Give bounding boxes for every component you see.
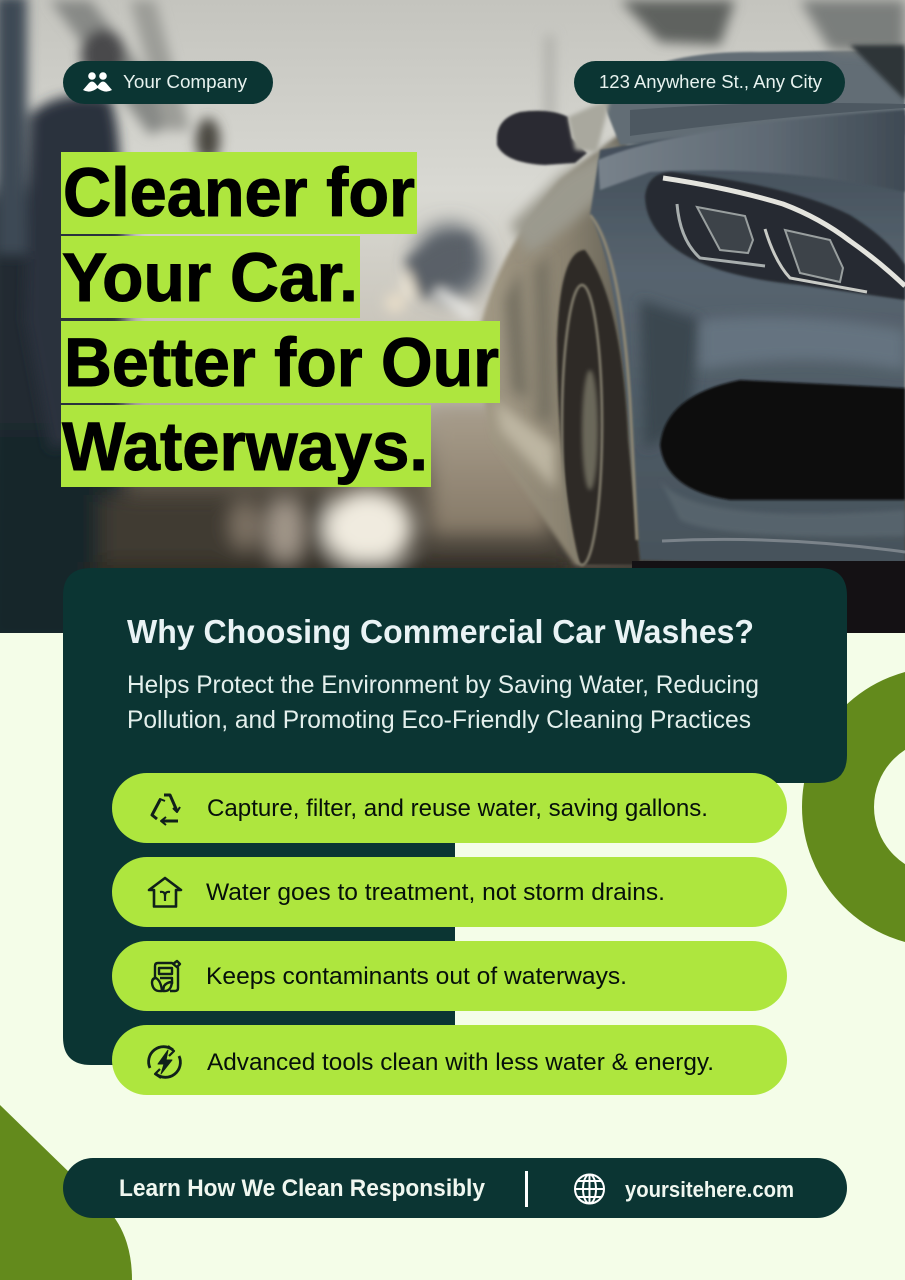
icon: globe: [575, 1174, 604, 1204]
icon: renewable energy bolt: [149, 1046, 180, 1078]
call to action: Learn How We Clean Responsibly: [119, 1175, 486, 1202]
title: Cleaner for: [63, 154, 415, 231]
benefit 4: advanced tools: Advanced tools clean with less water & energy.: [207, 1049, 714, 1076]
icon: people logo: [83, 72, 112, 92]
title: Better for Our: [64, 324, 499, 401]
panel description: Helps Protect the Environment by Saving Water, Reducing: [127, 671, 759, 699]
decorative ring, right: [838, 703, 905, 911]
footer bar: [63, 1158, 847, 1218]
panel: why choose commercial car washes: [63, 568, 847, 1065]
benefit 3: contaminants: Keeps contaminants out of waterways.: [206, 963, 627, 990]
hood and front body: [590, 115, 905, 570]
front grille: [660, 380, 905, 500]
top right badge: address: [574, 61, 845, 104]
icon: eco canister: [152, 961, 180, 991]
windshield and roof: [600, 50, 905, 145]
title: Waterways.: [62, 408, 428, 485]
decorative corner shape, bottom left: [0, 1105, 132, 1280]
icon: recycle: [152, 795, 180, 825]
headlight: [645, 172, 905, 300]
benefit 4: advanced tools: [112, 1025, 787, 1095]
benefit 1: reuse water: Capture, filter, and reuse water, saving gallons.: [207, 795, 708, 822]
benefit 3: contaminants: [112, 941, 787, 1011]
icon: eco house: [149, 878, 181, 906]
top right badge: address: 123 Anywhere St., Any City: [599, 72, 822, 92]
wheel arch and wheel: [557, 250, 640, 565]
title: [61, 152, 500, 487]
top left badge: company: [63, 61, 273, 104]
benefit 2: treatment: [112, 857, 787, 927]
benefit 2: treatment: Water goes to treatment, not storm drains.: [206, 879, 665, 906]
website: yoursitehere.com: [625, 1177, 794, 1202]
panel description: Pollution, and Promoting Eco-Friendly Cleaning Practices: [127, 706, 751, 734]
title: Your Car.: [62, 239, 358, 316]
blurred background scene: [0, 190, 570, 650]
top left badge: company: Your Company: [123, 72, 247, 92]
panel description: [127, 671, 759, 734]
mirror: [497, 111, 587, 165]
photo: car being washed: [0, 0, 905, 650]
benefit 1: reuse water: [112, 773, 787, 843]
car side panel: [477, 130, 640, 565]
wet body highlights: [640, 300, 700, 450]
panel heading: Why Choosing Commercial Car Washes?: [127, 613, 754, 650]
